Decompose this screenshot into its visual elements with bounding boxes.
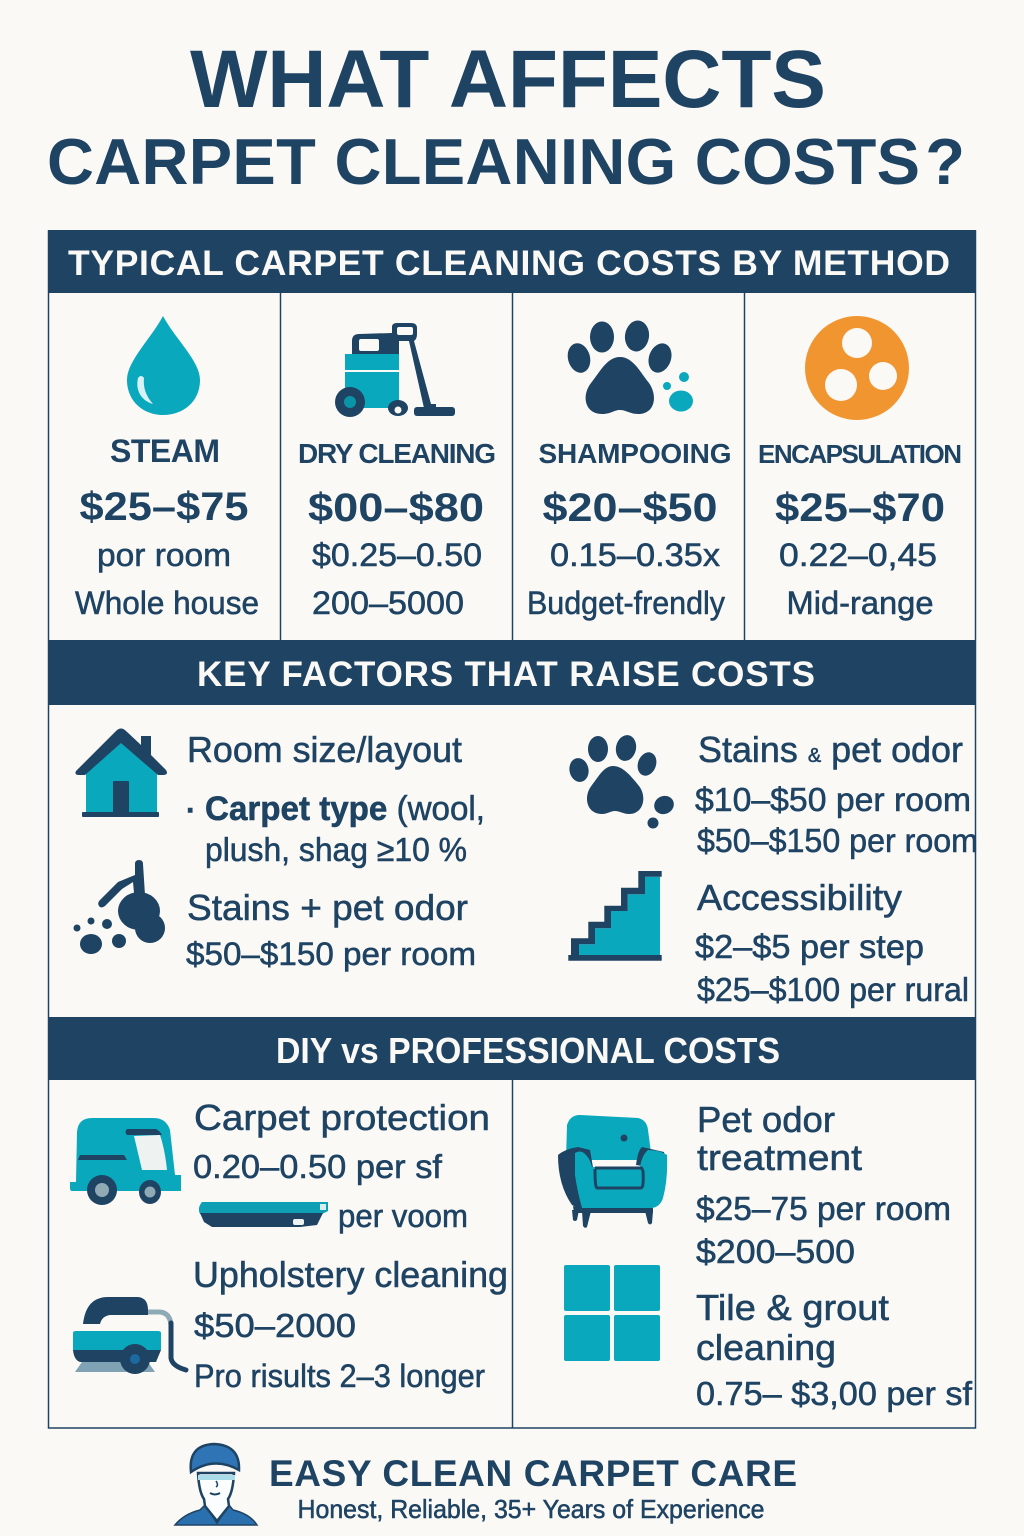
footer: EASY CLEAN CARPET CARE: [269, 1453, 797, 1494]
panel: DIY right: treatment: [697, 1137, 862, 1178]
panel: DIY left: Pro risults 2–3 longer: [194, 1358, 485, 1394]
panel: key factors right: $50–$150 per room: [697, 822, 978, 859]
section banner: typical costs by method: TYPICAL CARPET CLEANING COSTS BY METHOD: [68, 243, 950, 283]
footer: Honest, Reliable, 35+ Years of Experience: [298, 1494, 764, 1524]
panel: dry cleaning: 200–5000: [312, 585, 464, 621]
panel: key factors left: ·: [186, 794, 196, 827]
panel: DIY left: per voom: [338, 1198, 468, 1234]
panel: encapsulation: Mid-range: [786, 585, 934, 621]
panel: dry cleaning: DRY CLEANING: [298, 438, 496, 469]
section banner: DIY vs professional: DIY vs PROFESSIONAL COSTS: [276, 1030, 780, 1071]
frame lines: [48, 231, 976, 1428]
section banner: typical costs by method: [48, 230, 976, 293]
icon: water drop: [127, 316, 200, 415]
panel: DIY right: cleaning: [696, 1327, 836, 1368]
icon: van: [70, 1118, 181, 1205]
panel: DIY right: Pet odor: [697, 1099, 835, 1140]
panel: encapsulation: $25–$70: [775, 486, 945, 530]
icon: paw with bubbles: [564, 319, 693, 414]
panel: shampooing: SHAMPOOING: [538, 438, 732, 469]
icon: vacuum cleaner: [335, 323, 455, 417]
panel: shampooing: [527, 319, 732, 621]
panel: shampooing: 0.15–0.35x: [550, 537, 720, 573]
section banner: key factors: [48, 640, 976, 705]
panel: DIY left: Carpet protection: [194, 1097, 490, 1138]
panel: dry cleaning: $00–$80: [308, 486, 484, 530]
panel: key factors left: Room size/layout: [187, 729, 462, 770]
panel: encapsulation: 0.22–0,45: [779, 537, 937, 573]
icon: technician avatar: [175, 1444, 257, 1525]
icon: upholstery machine: [73, 1297, 186, 1374]
panel: steam: Whole house: [75, 585, 259, 621]
icon: paw: [567, 733, 677, 828]
panel: key factors right: [567, 729, 978, 1008]
icon: stairs: [568, 871, 662, 961]
panel: DIY right: Tile & grout: [696, 1287, 889, 1328]
section banner: key factors: KEY FACTORS THAT RAISE COSTS: [197, 655, 815, 694]
title: CARPET CLEANING COSTS?: [47, 125, 965, 198]
icon: house: [75, 728, 167, 817]
panel: dry cleaning: [298, 323, 496, 621]
panel: key factors left: Stains + pet odor: [187, 887, 468, 928]
panel: DIY right: 0.75– $3,00 per sf: [696, 1375, 973, 1412]
title: WHAT AFFECTS: [190, 34, 826, 125]
panel: steam: por room: [97, 537, 231, 573]
title: [47, 34, 965, 198]
panel: key factors left: $50–$150 per room: [186, 936, 476, 972]
panel: key factors right: Stains & pet odor: [698, 729, 963, 770]
icon: flat cleaning bar: [199, 1202, 328, 1227]
panel: dry cleaning: $0.25–0.50: [312, 537, 482, 573]
panel: encapsulation: ENCAPSULATION: [758, 439, 962, 469]
panel: key factors right: $2–$5 per step: [695, 928, 924, 965]
panel: steam: [75, 316, 259, 621]
panel: DIY right: [558, 1099, 973, 1412]
footer: [175, 1444, 797, 1525]
panel: DIY left: $50–2000: [194, 1307, 356, 1344]
panel: key factors left: plush, shag ≥10 %: [205, 831, 467, 868]
panel: steam: STEAM: [110, 433, 220, 469]
section banner: DIY vs professional: [48, 1017, 976, 1080]
panel: key factors right: $10–$50 per room: [695, 781, 971, 818]
panel: key factors right: Accessibility: [697, 877, 902, 918]
panel: shampooing: Budget-frendly: [527, 585, 725, 621]
panel: key factors right: $25–$100 per rural: [697, 971, 969, 1008]
icon: stain splash: [74, 860, 165, 954]
icon: armchair: [558, 1115, 667, 1228]
panel: DIY right: $25–75 per room: [696, 1190, 951, 1227]
panel: shampooing: $20–$50: [542, 486, 718, 530]
panel: DIY right: $200–500: [696, 1233, 855, 1270]
panel: key factors left: Carpet type (wool,: [205, 790, 485, 828]
panel: DIY left: [70, 1097, 508, 1394]
icon: orange circle with dots: [805, 316, 909, 420]
panel: DIY left: 0.20–0.50 per sf: [193, 1148, 443, 1185]
panel: key factors left: [74, 728, 485, 972]
icon: tile grid: [564, 1265, 660, 1361]
panel: encapsulation: [758, 316, 962, 621]
panel: steam: $25–$75: [80, 485, 248, 529]
panel: DIY left: Upholstery cleaning: [193, 1254, 508, 1295]
